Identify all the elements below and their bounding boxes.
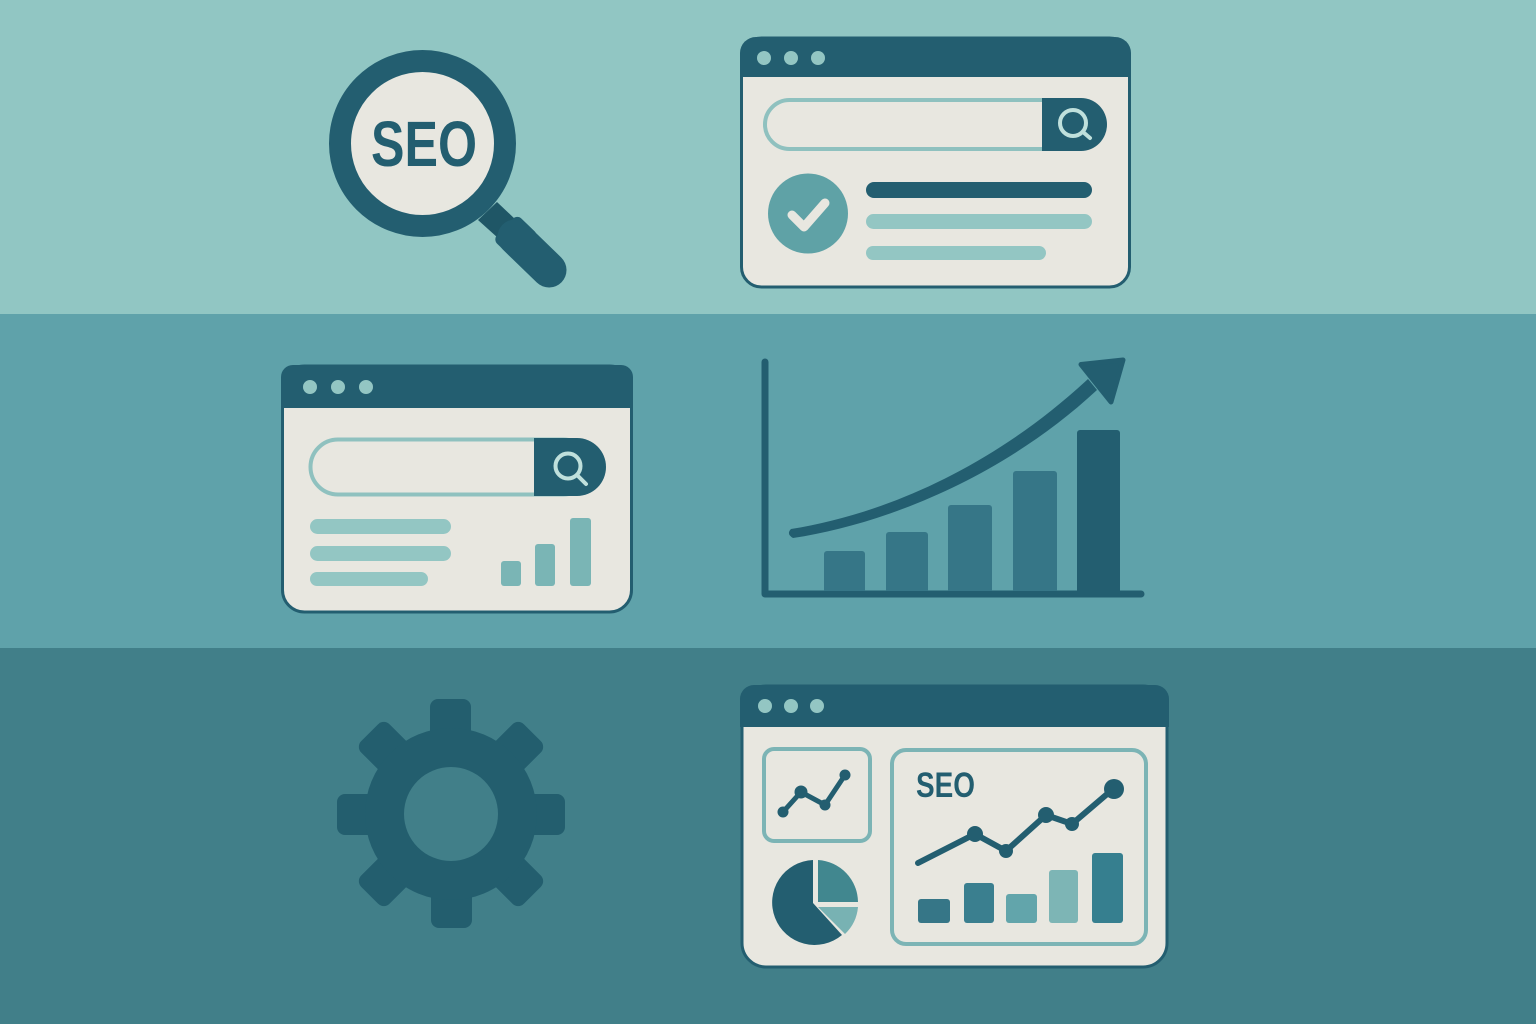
- large SEO chart card: SEO: [916, 766, 975, 805]
- icon: SEO magnifying glass: SEO: [371, 108, 477, 180]
- band: middle background: [0, 314, 1536, 648]
- panel: browser search analytics: [281, 365, 633, 612]
- panel: SEO dashboard browser: [740, 685, 1169, 967]
- pie chart: [772, 860, 858, 945]
- large SEO chart card: [892, 750, 1146, 944]
- chart: growth bars with arrow: [765, 360, 1141, 594]
- icon: gear: [337, 699, 565, 928]
- small line chart card: [764, 749, 870, 841]
- icon: SEO magnifying glass: [340, 61, 549, 270]
- band: bottom background: [0, 648, 1536, 1024]
- panel: browser search result: [740, 37, 1131, 287]
- band: top background: [0, 0, 1536, 314]
